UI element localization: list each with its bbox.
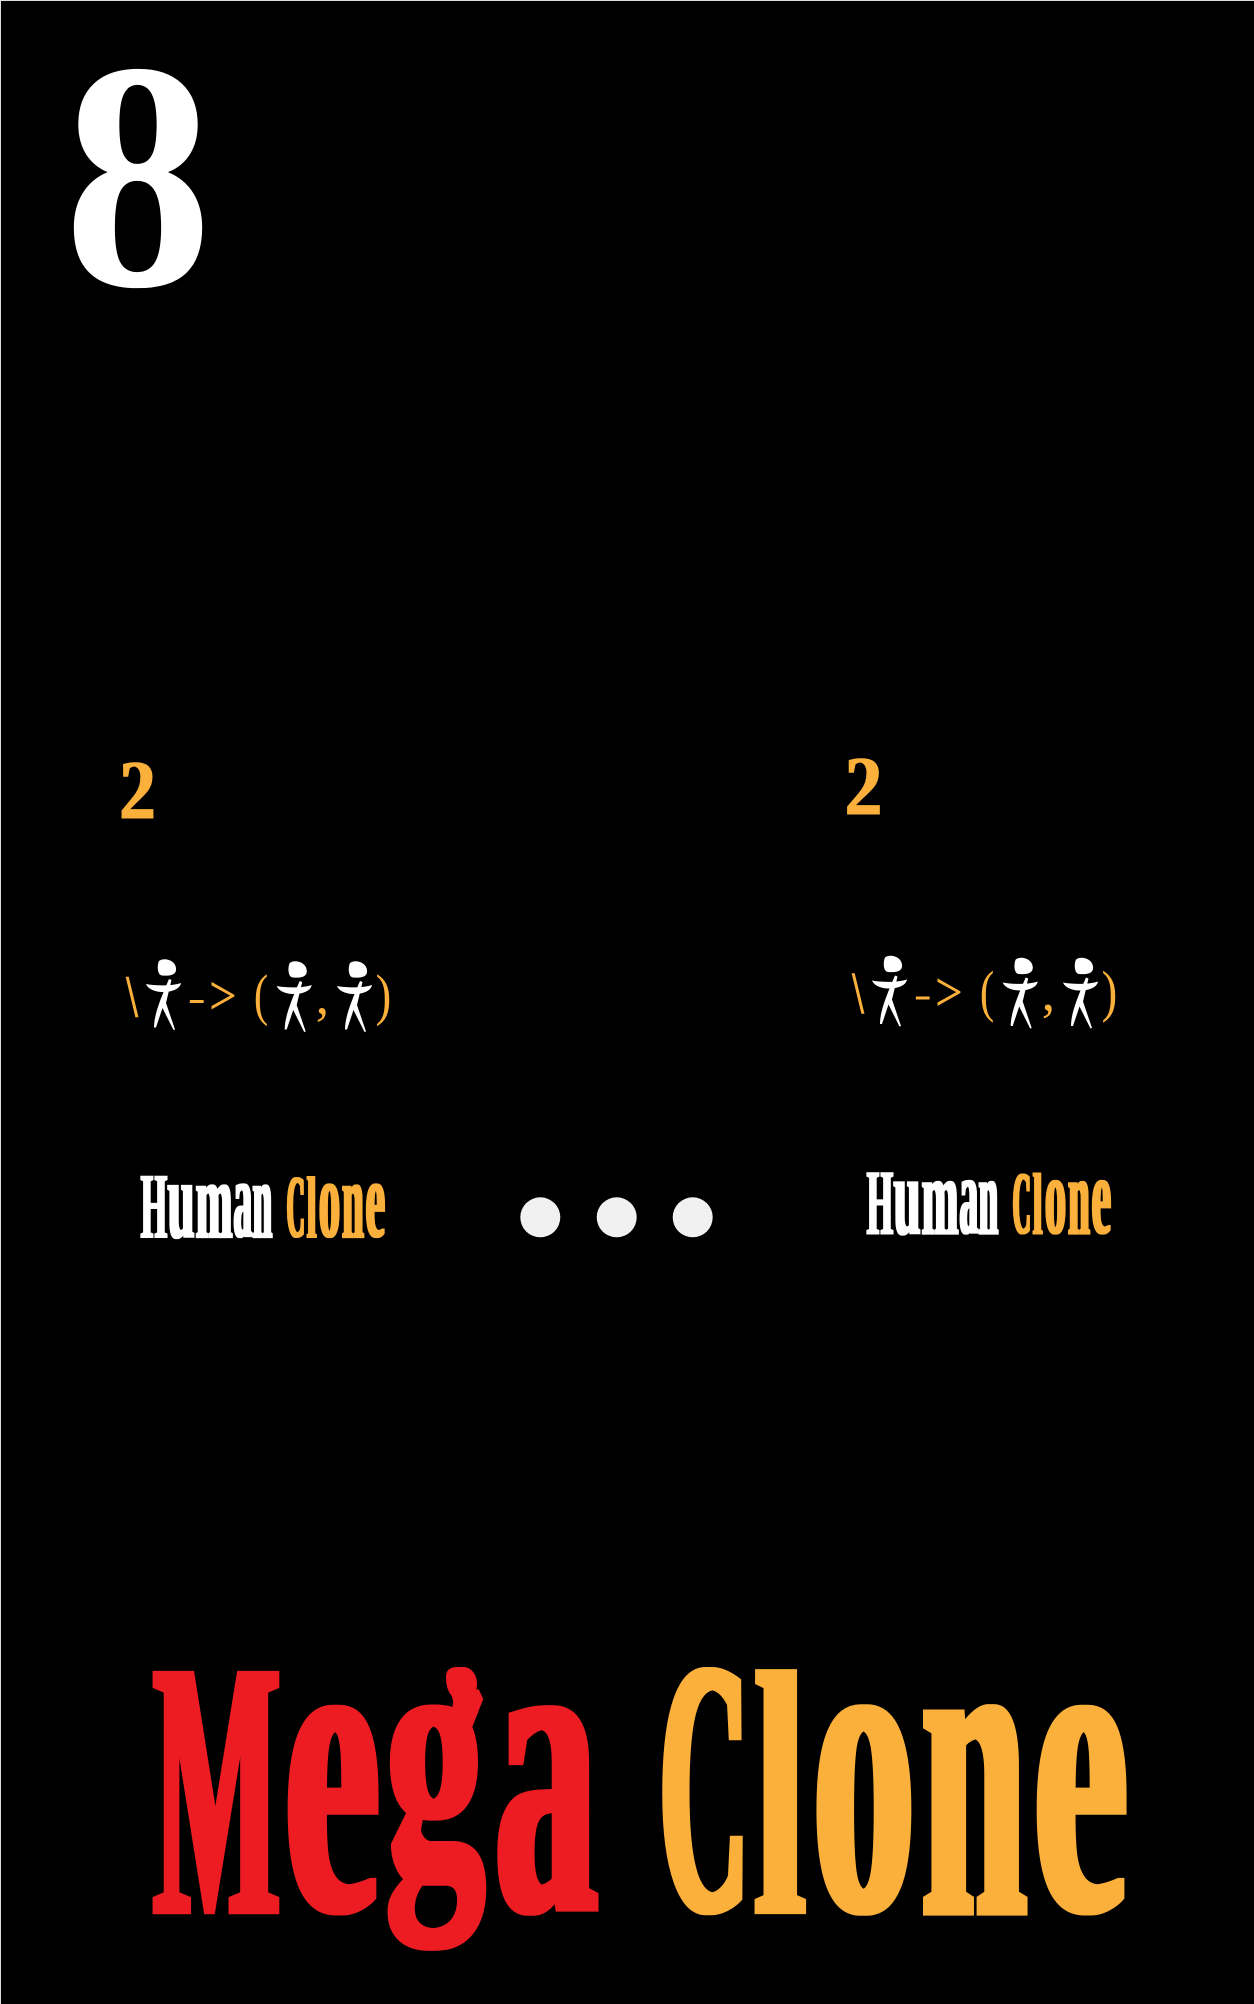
- word: Clone: e: [1034, 1527, 1128, 2003]
- word: Mega: e: [285, 1528, 380, 2003]
- label: Human Clone right: n: [1068, 1137, 1090, 1260]
- number 2 right: 2: [845, 740, 882, 834]
- formula: clone function left: -: [188, 976, 206, 1020]
- icon: human figure: [1003, 958, 1038, 1028]
- panel: left human clone: [120, 744, 391, 1263]
- formula: clone function right: -: [914, 972, 932, 1017]
- formula: clone function right: \: [852, 961, 864, 1025]
- label: Human Clone right: o: [1045, 1135, 1066, 1258]
- label: Human Clone left: n: [342, 1140, 364, 1263]
- formula: clone function left: ): [376, 963, 391, 1027]
- label: Human Clone left: e: [366, 1139, 385, 1262]
- label: Human Clone left: u: [168, 1137, 194, 1262]
- number 2 left: 2: [120, 744, 155, 838]
- label: Human Clone right: n: [979, 1134, 998, 1259]
- word: Mega: [154, 1526, 597, 2003]
- formula: clone function right: (: [980, 959, 994, 1023]
- label: Human Clone left: [141, 1137, 385, 1263]
- label: Human Clone right: [867, 1133, 1111, 1260]
- panel: right human clone: [845, 740, 1117, 1260]
- formula: clone function left: >: [209, 966, 236, 1027]
- label: Human Clone left: n: [253, 1138, 272, 1262]
- label: Human Clone right: C: [1013, 1155, 1031, 1253]
- icon: human figure: [872, 956, 907, 1026]
- word: Clone: C: [660, 1587, 748, 1989]
- formula: clone function right: >: [935, 963, 962, 1023]
- heading: Mega Clone: [154, 1523, 1128, 2004]
- label: Human Clone right: m: [922, 1137, 958, 1259]
- label: Human Clone right: a: [960, 1134, 978, 1257]
- word: Clone: l: [755, 1603, 805, 1987]
- icon: human figure: [1063, 958, 1098, 1028]
- icon: human figure: [337, 961, 372, 1032]
- label: Human Clone right: e: [1092, 1136, 1111, 1258]
- word: Clone: n: [922, 1523, 1026, 2004]
- word: Mega: M: [154, 1588, 279, 1992]
- label: Human Clone left: l: [307, 1161, 316, 1258]
- word: Mega: a: [495, 1526, 597, 2002]
- formula: clone function right: ,: [1042, 963, 1055, 1022]
- title: number 8: 8: [64, 0, 212, 356]
- word: Clone: [660, 1523, 1128, 2004]
- ellipsis dots: [520, 1197, 713, 1237]
- label: Human Clone left: H: [141, 1157, 167, 1259]
- label: Human Clone left: m: [196, 1140, 232, 1263]
- formula: clone function right: [852, 956, 1117, 1028]
- word: Clone: o: [813, 1527, 915, 2002]
- label: Human Clone right: l: [1033, 1158, 1042, 1254]
- formula: clone function left: ,: [316, 966, 329, 1026]
- icon: human figure: [277, 961, 312, 1032]
- formula: clone function left: [126, 959, 391, 1032]
- formula: clone function left: (: [254, 963, 268, 1026]
- label: Human Clone left: o: [319, 1139, 340, 1262]
- label: Human Clone right: u: [894, 1133, 920, 1258]
- word: Mega: g: [386, 1561, 484, 1954]
- formula: clone function left: \: [126, 964, 138, 1029]
- label: Human Clone left: a: [234, 1137, 252, 1261]
- formula: clone function right: ): [1102, 960, 1117, 1023]
- icon: human figure: [146, 959, 181, 1030]
- label: Human Clone right: H: [867, 1153, 893, 1255]
- label: Human Clone left: C: [287, 1159, 305, 1257]
